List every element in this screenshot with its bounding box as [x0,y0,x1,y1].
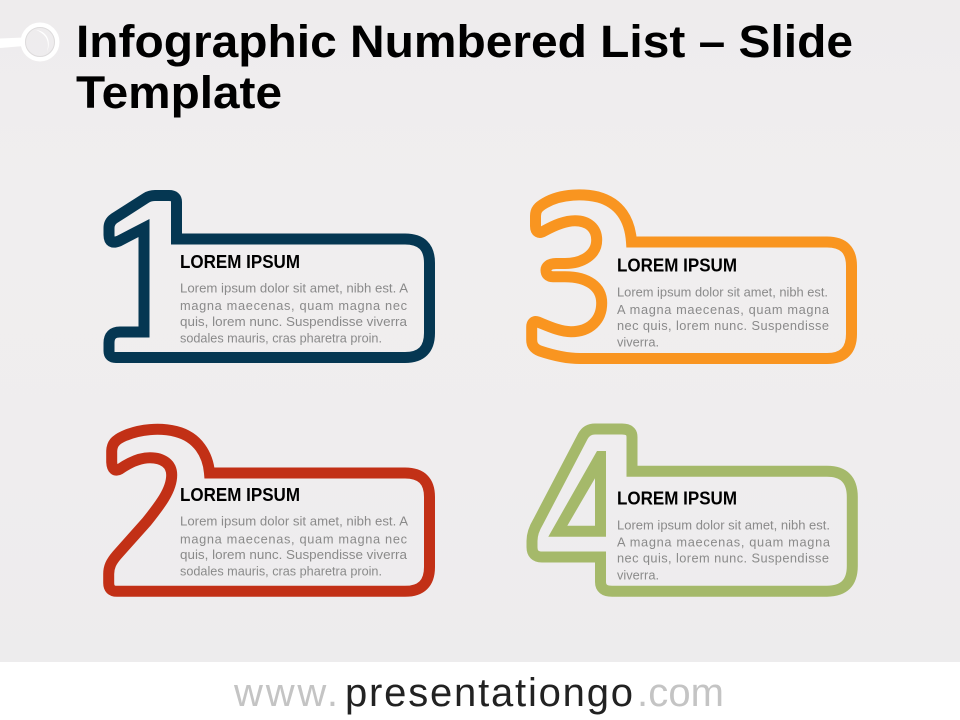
footer website address [233,671,724,715]
body text: viverra. [617,335,659,350]
footer website address: presentationgo [345,671,633,715]
body text: A magna maecenas, quam magna [617,535,831,550]
number 4 inner triangle [548,451,606,537]
body text [617,285,830,350]
number 2 outline [109,429,429,591]
body text: Lorem ipsum dolor sit amet, nibh est. A [180,514,408,529]
number 3 outline [532,195,852,358]
title: Template [76,67,282,118]
panel: item 2 (red) [109,429,429,591]
body text: Lorem ipsum dolor sit amet, nibh est. [617,517,830,532]
footer website address: .com [637,671,724,715]
body text: Lorem ipsum dolor sit amet, nibh est. A [180,281,408,296]
heading: LOREM IPSUM [180,485,300,505]
title: Infographic Numbered List – Slide [76,16,853,67]
body text: magna maecenas, quam magna nec [180,298,408,313]
number 1 outline [109,196,430,358]
icon: white ring with pointer [0,25,57,59]
body text [180,281,408,346]
number 4 outline [532,429,852,591]
body text: Lorem ipsum dolor sit amet, nibh est. [617,285,828,300]
body text: sodales mauris, cras pharetra proin. [180,331,382,346]
panel: item 4 (green) [532,429,852,591]
body text [617,517,831,582]
heading: LOREM IPSUM [180,252,300,272]
panel: item 3 (orange) [532,195,852,358]
body text: magna maecenas, quam magna nec [180,531,408,546]
heading: LOREM IPSUM [617,256,737,276]
body text [180,514,408,579]
panel: item 1 (navy) [109,196,430,358]
body text: quis, lorem nunc. Suspendisse viverra [180,314,408,329]
title [76,16,853,118]
heading: LOREM IPSUM [617,488,737,508]
body text: A magna maecenas, quam magna [617,302,830,317]
body text: sodales mauris, cras pharetra proin. [180,564,382,579]
body text: quis, lorem nunc. Suspendisse viverra [180,547,408,562]
body text: nec quis, lorem nunc. Suspendisse [617,318,829,333]
body text: viverra. [617,567,659,582]
body text: nec quis, lorem nunc. Suspendisse [617,551,829,566]
footer website address: www. [233,671,338,715]
